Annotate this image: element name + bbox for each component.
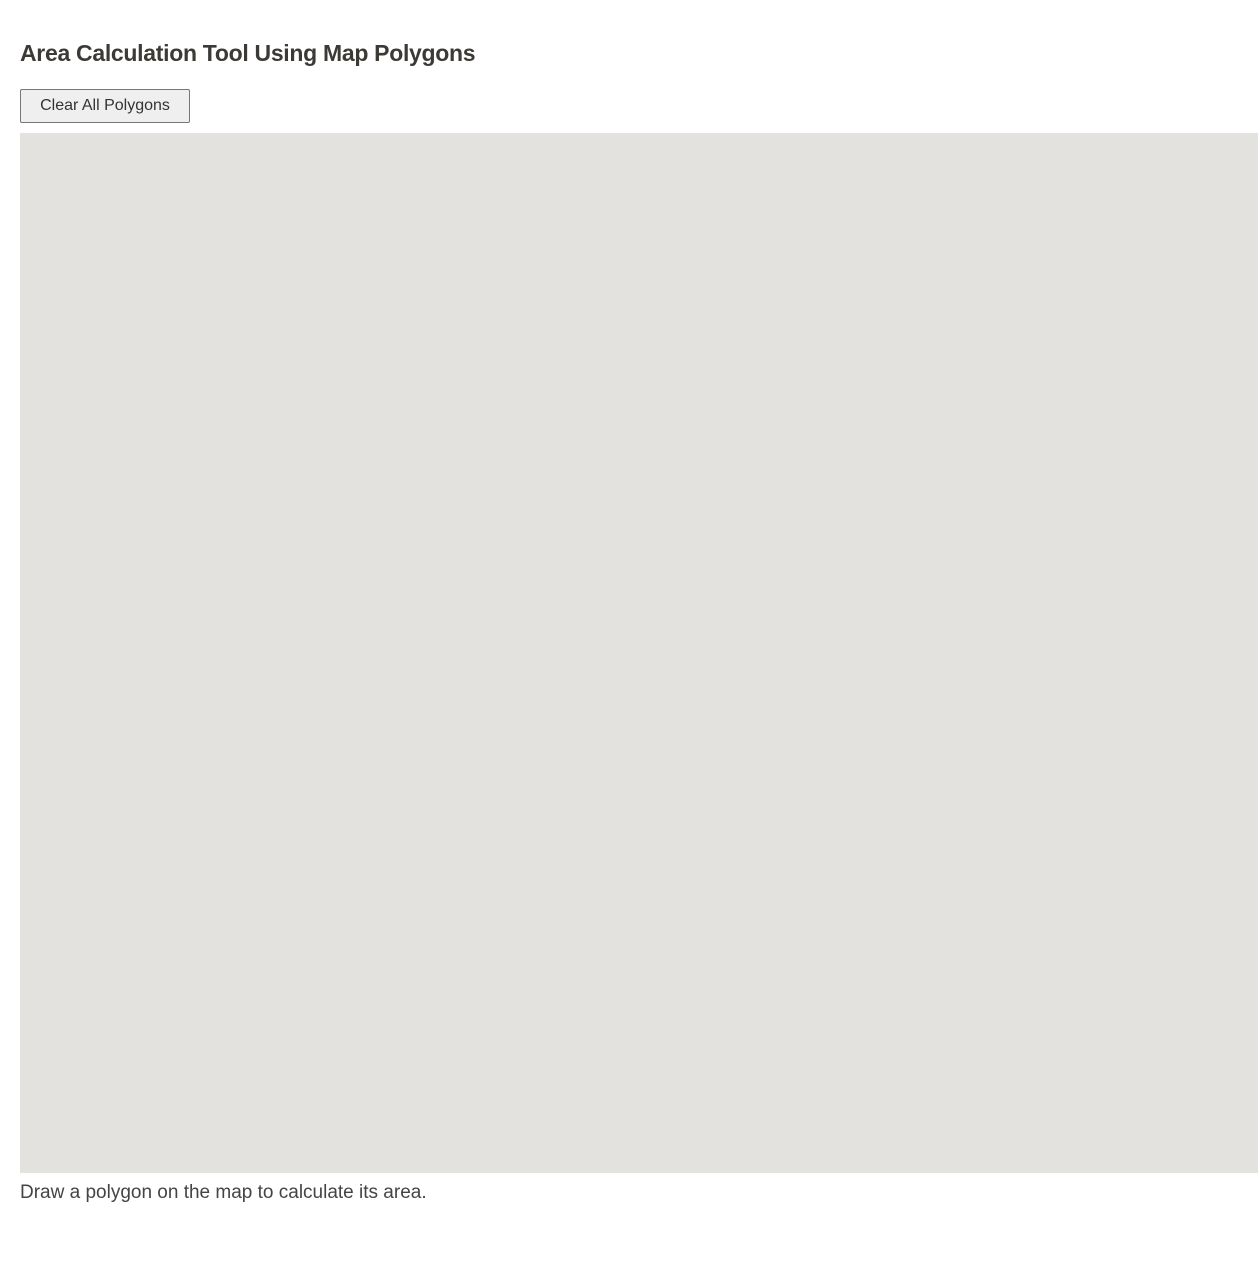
instruction text: Draw a polygon on the map to calculate its area. (20, 1182, 427, 1203)
button: clear all polygons: Clear All Polygons (40, 97, 170, 114)
button: clear all polygons (20, 89, 190, 123)
title: Area Calculation Tool Using Map Polygons (20, 40, 475, 66)
